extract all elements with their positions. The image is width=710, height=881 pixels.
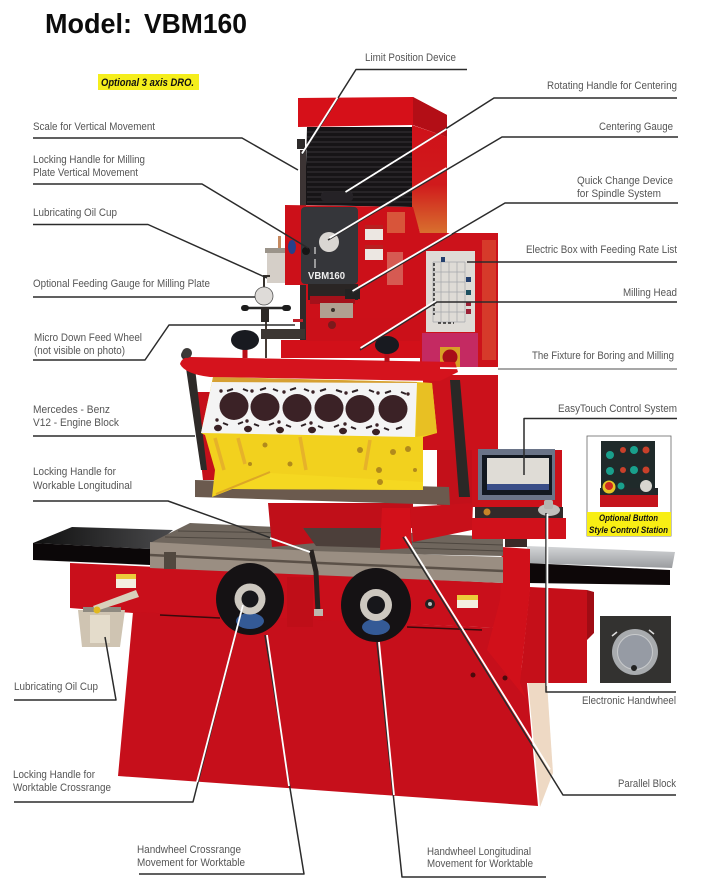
base plate under engine block (195, 480, 450, 505)
rear vertical red frame (193, 375, 498, 550)
fixture bar (180, 348, 458, 381)
bellows (297, 127, 412, 207)
title: VBM160 (144, 8, 247, 39)
control station caption (587, 512, 671, 536)
leader: optional feeding gauge (33, 296, 255, 298)
leader: rotating handle (345, 98, 677, 193)
leader: quick change device (352, 203, 678, 293)
leader: engine block (33, 435, 195, 437)
leader: scale (33, 138, 298, 170)
labels: left column: Scale for Vertical Movement (33, 121, 155, 133)
labels: right column: Parallel Block (618, 778, 676, 790)
labels: left column: Locking Handle for Milling (33, 154, 145, 166)
labels: left column: Workable Longitudinal (33, 480, 132, 492)
labels: right column: Electric Box with Feeding Rate List (526, 244, 677, 256)
labels: right column (365, 52, 677, 790)
column top cap (298, 97, 447, 233)
leader: locking handle crossrange (14, 605, 243, 802)
electronic handwheel photo (600, 616, 671, 683)
title (45, 8, 247, 39)
labels: bottom: Movement for Worktable (137, 857, 245, 869)
lubricating oil cup, lower (78, 590, 139, 647)
control station caption: Style Control Station (589, 525, 668, 536)
labels: left column: Micro Down Feed Wheel (34, 332, 142, 344)
leader: locking handle milling (33, 184, 308, 248)
handwheel longitudinal (341, 568, 411, 642)
table locking lever (311, 550, 323, 616)
right table extension (527, 546, 675, 585)
head gasket face with cylinder bores (201, 382, 417, 437)
labels: right column: Rotating Handle for Centering (547, 80, 677, 92)
easytouch control system (472, 449, 566, 547)
lower head base (281, 318, 421, 358)
labels: left column: V12 - Engine Block (33, 417, 119, 429)
leader: lubricating oil cup upper (33, 224, 267, 278)
spindle assembly (308, 284, 360, 318)
leader: electric box (467, 261, 677, 263)
fixture knobs (231, 330, 399, 362)
labels: left column: (not visible on photo) (34, 345, 125, 357)
milling head body (285, 205, 420, 340)
control station caption: Optional Button (599, 513, 658, 524)
labels: left column: Plate Vertical Movement (33, 167, 138, 179)
labels: left column: Optional Feeding Gauge for Milling Plate (33, 278, 210, 290)
leader: parallel block (403, 536, 676, 795)
labels: left column: Mercedes - Benz (33, 404, 110, 416)
leader: fixture (440, 368, 677, 369)
labels: left column: Worktable Crossrange (13, 782, 111, 794)
leader: handwheel crossrange (139, 635, 304, 874)
labels: right column: for Spindle System (577, 188, 661, 200)
control head panel: VBM160 (308, 271, 345, 282)
labels: left column: Lubricating Oil Cup (33, 207, 117, 219)
labels: left column: Locking Handle for (13, 769, 95, 781)
upper oil cup (265, 236, 285, 283)
machine illustration (33, 97, 675, 807)
labels: left column: Lubricating Oil Cup (14, 681, 98, 693)
leader: centering gauge (328, 137, 678, 240)
dark clamp arms (181, 350, 470, 497)
leader: easytouch (524, 418, 677, 475)
leader: lubricating oil cup lower (14, 637, 116, 700)
labels: bottom: Movement for Worktable (427, 858, 533, 870)
electric box (420, 233, 498, 367)
optional button style control station (587, 436, 671, 536)
labels: bottom (137, 844, 533, 870)
labels: right column: Milling Head (623, 287, 677, 299)
engine block (201, 377, 437, 497)
title: Model: (45, 8, 132, 39)
labels: right column: Limit Position Device (365, 52, 456, 64)
optional DRO tag (98, 74, 199, 90)
handwheel crossrange (216, 563, 284, 635)
labels: left column: Locking Handle for (33, 466, 116, 478)
labels: right column: Electronic Handwheel (582, 695, 676, 707)
worktable (150, 523, 503, 583)
labels: right column: The Fixture for Boring and Milling (532, 350, 674, 362)
left table extension (33, 527, 173, 565)
leader: micro down feed wheel (33, 325, 295, 360)
feeding rate list (426, 251, 475, 332)
leader: handwheel longitudinal (377, 642, 546, 877)
leader: electronic handwheel (546, 513, 676, 692)
machine base (70, 547, 594, 807)
labels: left column (13, 121, 210, 794)
warning labels (116, 574, 478, 608)
labels: bottom: Handwheel Crossrange (137, 844, 241, 856)
leader: locking handle longitudinal (33, 501, 310, 552)
optional DRO tag: Optional 3 axis DRO. (101, 77, 194, 89)
leader: milling head (360, 301, 677, 350)
control head panel (301, 207, 358, 284)
feeding gauge (241, 276, 305, 358)
labels: bottom: Handwheel Longitudinal (427, 846, 531, 858)
labels: right column: EasyTouch Control System (558, 403, 677, 415)
leader: limit position device (302, 70, 467, 155)
labels: right column: Quick Change Device (577, 175, 673, 187)
labels: right column: Centering Gauge (599, 121, 673, 133)
